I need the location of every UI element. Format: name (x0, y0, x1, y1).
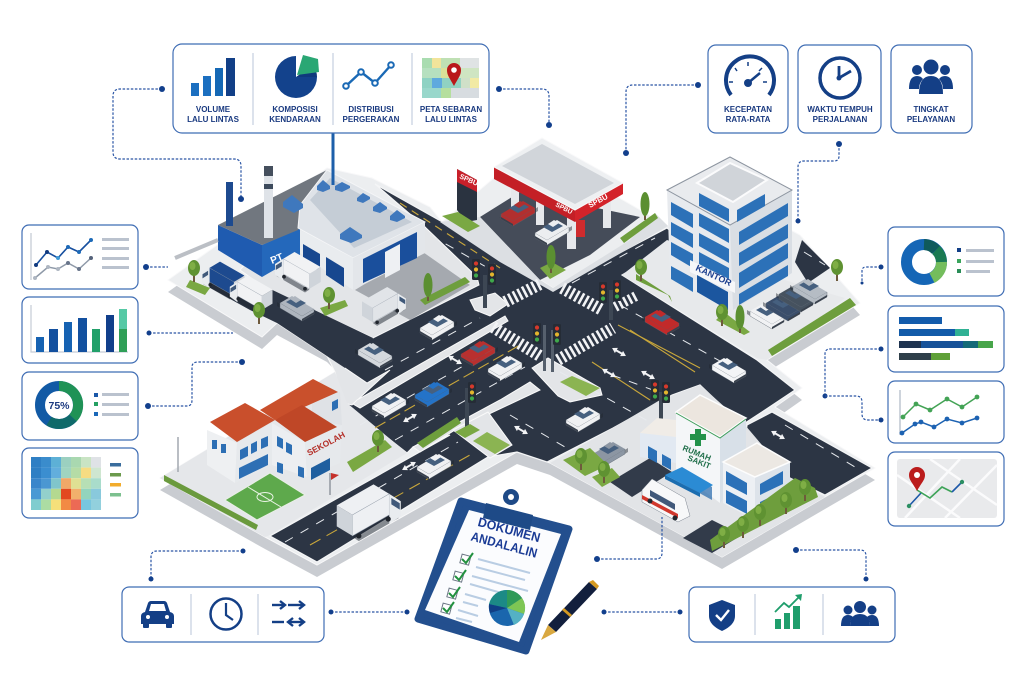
donut legend (957, 248, 994, 273)
factory fence (175, 240, 218, 258)
label: service level: TINGKAT (914, 105, 949, 114)
factory parked blue truck (202, 262, 244, 299)
kantor right face (730, 190, 792, 310)
SPBU price sign: SPBU (458, 173, 479, 188)
icon: volume bars (191, 58, 235, 96)
hospital tower (676, 412, 720, 503)
clipboard clip (483, 489, 533, 530)
panel: traffic analysis metrics (173, 44, 489, 133)
gray series (33, 256, 93, 280)
donut chart (40, 386, 78, 424)
central island (532, 358, 602, 402)
kantor sign: KANTOR (694, 263, 734, 288)
icon: clock (820, 58, 860, 98)
panel: average speed (708, 45, 788, 133)
label: distribution: PERGERAKAN (343, 115, 400, 124)
icon: clock (210, 598, 242, 630)
icon: heat map with pin (422, 58, 479, 98)
factory left blue wall (218, 225, 262, 277)
hospital right wing (723, 462, 755, 520)
factory main roof (298, 170, 425, 258)
kantor entrance (697, 275, 728, 310)
SPBU cars (499, 201, 572, 245)
checklist (441, 553, 530, 622)
school building (207, 379, 347, 483)
parked car at hospital (589, 442, 628, 467)
road network (160, 184, 872, 562)
canopy pillars (511, 180, 519, 212)
cars on main road (277, 296, 748, 479)
kantor parking cars (747, 279, 829, 329)
isometric city base platform (160, 157, 875, 577)
hospital green cross (690, 429, 706, 446)
icon: pen (541, 580, 599, 640)
icon: growth chart (775, 594, 802, 629)
document title (469, 514, 542, 561)
connector lines (113, 82, 884, 614)
sidewalk wedge by school corner (325, 352, 390, 405)
panel: bottom left icons (122, 587, 324, 642)
lower median with hedge (413, 382, 540, 452)
map tile (897, 459, 997, 518)
document pie chart (489, 590, 525, 626)
SPBU landscaping (540, 192, 658, 279)
panel: donut right (888, 227, 1004, 296)
SPBU canopy: SPBU (587, 192, 609, 210)
panel: service level (891, 45, 972, 133)
factory roof skylights (283, 180, 405, 243)
clipboard paper (425, 510, 561, 642)
panel: bar chart left (22, 297, 138, 363)
icon: people (841, 601, 879, 626)
label: travel time: WAKTU TEMPUH (807, 105, 873, 114)
blue series (900, 416, 979, 435)
label: speed: KECEPATAN (724, 105, 772, 114)
label: volume: VOLUME (196, 105, 231, 114)
factory building (218, 133, 425, 290)
hospital entrance canopy (683, 470, 712, 500)
factory trees (186, 260, 470, 324)
spbu forecourt (480, 192, 640, 280)
panel: stacked bars right (888, 306, 1004, 372)
green series (901, 395, 979, 419)
icon: speedometer (726, 56, 774, 95)
clipboard: dokumen andalalin (418, 489, 569, 651)
kantor right windows (737, 194, 788, 305)
lane markings (430, 235, 495, 272)
school roofs (210, 403, 275, 442)
canopy roof (494, 167, 575, 222)
hospital block surface (550, 385, 825, 557)
ambulance (642, 479, 690, 522)
canopy SPBU labels: SPBU (554, 202, 574, 216)
label: distribution: DISTRIBUSI (348, 105, 394, 114)
factory loading truck (275, 252, 321, 292)
blue series (34, 238, 93, 267)
factory white truck (230, 276, 272, 313)
factory block sidewalk (240, 200, 479, 338)
panel: line chart right (888, 381, 1004, 443)
kantor roof (667, 157, 792, 225)
document title: ANDALALIN (469, 529, 539, 561)
panel: route map right (888, 452, 1004, 526)
factory side truck (362, 287, 406, 326)
panel: heat map left (22, 448, 138, 518)
factory chimneys (226, 182, 233, 226)
kantor office building (667, 157, 792, 310)
factory yard (355, 250, 470, 320)
label: heat map: LALU LINTAS (425, 115, 478, 124)
lorry on lower road (337, 484, 401, 541)
document title: DOKUMEN (476, 514, 542, 545)
icon: car (141, 601, 174, 628)
school landscaping (164, 430, 392, 530)
icon: vehicle composition pie (275, 55, 319, 98)
hospital left wing (640, 420, 676, 463)
SPBU price sign (442, 169, 480, 232)
heat map legend (110, 463, 121, 496)
panel: line chart left (22, 225, 138, 289)
factory walls (300, 230, 353, 290)
school flag (330, 473, 339, 495)
kantor hedges and trees (635, 259, 856, 356)
traffic lights (465, 259, 670, 430)
hospital label: SAKIT (686, 454, 712, 471)
factory PT label: PT (269, 252, 285, 267)
kantor left windows (671, 193, 729, 292)
fuel pump (576, 220, 585, 237)
donut value: 75% (48, 400, 70, 412)
icon: opposing arrows (272, 601, 304, 626)
median hedge and island greenery (417, 376, 600, 454)
donut legend (94, 393, 129, 416)
factory antenna (332, 133, 334, 185)
icon: people (909, 60, 953, 94)
label: composition: KOMPOSISI (272, 105, 318, 114)
kantor penthouse (697, 163, 767, 202)
school walls (207, 430, 237, 483)
road arrows (401, 345, 786, 473)
factory gray roof (218, 170, 327, 245)
panel: donut 75 percent (22, 372, 138, 440)
map pin (909, 467, 925, 491)
icon: movement line (343, 62, 394, 89)
traffic light island (453, 412, 512, 458)
hospital building (640, 395, 790, 520)
hospital trees (563, 448, 818, 551)
hospital label: RUMAH (681, 444, 712, 463)
label: composition: KENDARAAN (269, 115, 321, 124)
school football field (225, 473, 305, 520)
panel: travel time (798, 45, 881, 133)
upper road thin median (353, 316, 508, 408)
label: volume: LALU LINTAS (187, 115, 240, 124)
school block surface (160, 372, 407, 537)
legend lines (102, 238, 129, 269)
label: service level: PELAYANAN (907, 115, 955, 124)
donut chart (906, 244, 942, 280)
SPBU canopy (494, 138, 623, 249)
panel: bottom right icons (689, 587, 895, 642)
school windows (212, 399, 338, 480)
clipboard board (418, 501, 569, 651)
traffic light curb island (470, 293, 508, 316)
kantor block surface (622, 240, 845, 360)
route line (908, 481, 963, 507)
label: heat map: PETA SEBARAN (420, 105, 482, 114)
icon: shield (709, 600, 735, 631)
label: speed: RATA-RATA (726, 115, 771, 124)
kantor sign (690, 260, 735, 293)
crosswalks (493, 283, 638, 360)
kantor left face (667, 190, 733, 310)
label: travel time: PERJALANAN (813, 115, 868, 124)
school sign: SEKOLAH (305, 429, 347, 458)
hospital parking (610, 458, 672, 497)
heat map cells (31, 457, 101, 510)
